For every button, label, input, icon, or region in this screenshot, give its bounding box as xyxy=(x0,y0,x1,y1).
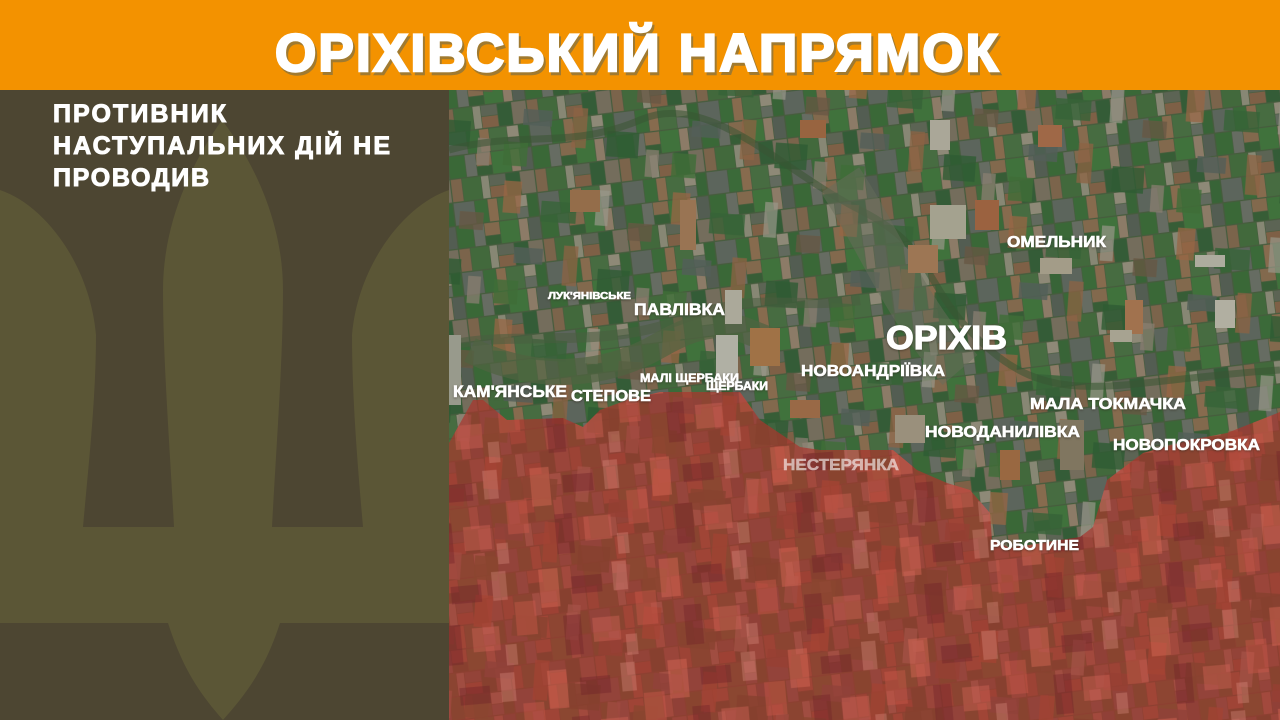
label: Мала Токмачка: МАЛА ТОКМАЧКА xyxy=(1030,396,1186,413)
label: Лук'янівське: ЛУК'ЯНІВСЬКЕ xyxy=(548,291,631,302)
label: Новоандріївка: НОВОАНДРІЇВКА xyxy=(801,362,945,380)
label: Оріхів: ОРІХІВ xyxy=(886,319,1007,356)
label: Щербаки: ЩЕРБАКИ xyxy=(706,381,768,393)
label: Павлівка: ПАВЛІВКА xyxy=(634,301,725,319)
occupied territory overlay xyxy=(449,392,1280,720)
trident emblem watermark xyxy=(0,120,449,720)
left panel background xyxy=(0,90,449,720)
panel statement text: ПРОВОДИВ xyxy=(53,164,209,192)
panel statement text xyxy=(53,100,390,192)
satellite map xyxy=(449,90,1280,720)
label: Роботине: РОБОТИНЕ xyxy=(990,537,1079,554)
label: Новопокровка: НОВОПОКРОВКА xyxy=(1113,437,1260,454)
label: Малі Щербаки: МАЛІ ЩЕРБАКИ xyxy=(640,371,739,385)
label: Омельник: ОМЕЛЬНИК xyxy=(1007,234,1107,251)
label: Нестерянка: НЕСТЕРЯНКА xyxy=(783,457,899,474)
header bar xyxy=(0,0,1280,90)
map detail fields and villages xyxy=(449,113,1280,480)
panel statement text: ПРОТИВНИК xyxy=(53,100,227,128)
label: Степове: СТЕПОВЕ xyxy=(571,388,651,405)
title: ОРІХІВСЬКИЙ НАПРЯМОК xyxy=(275,22,999,83)
panel statement text: НАСТУПАЛЬНИХ ДІЙ НЕ xyxy=(53,130,390,160)
label: Кам'янське: КАМ'ЯНСЬКЕ xyxy=(453,383,567,401)
map place labels xyxy=(453,234,1260,554)
label: Новоданилівка: НОВОДАНИЛІВКА xyxy=(925,424,1080,441)
